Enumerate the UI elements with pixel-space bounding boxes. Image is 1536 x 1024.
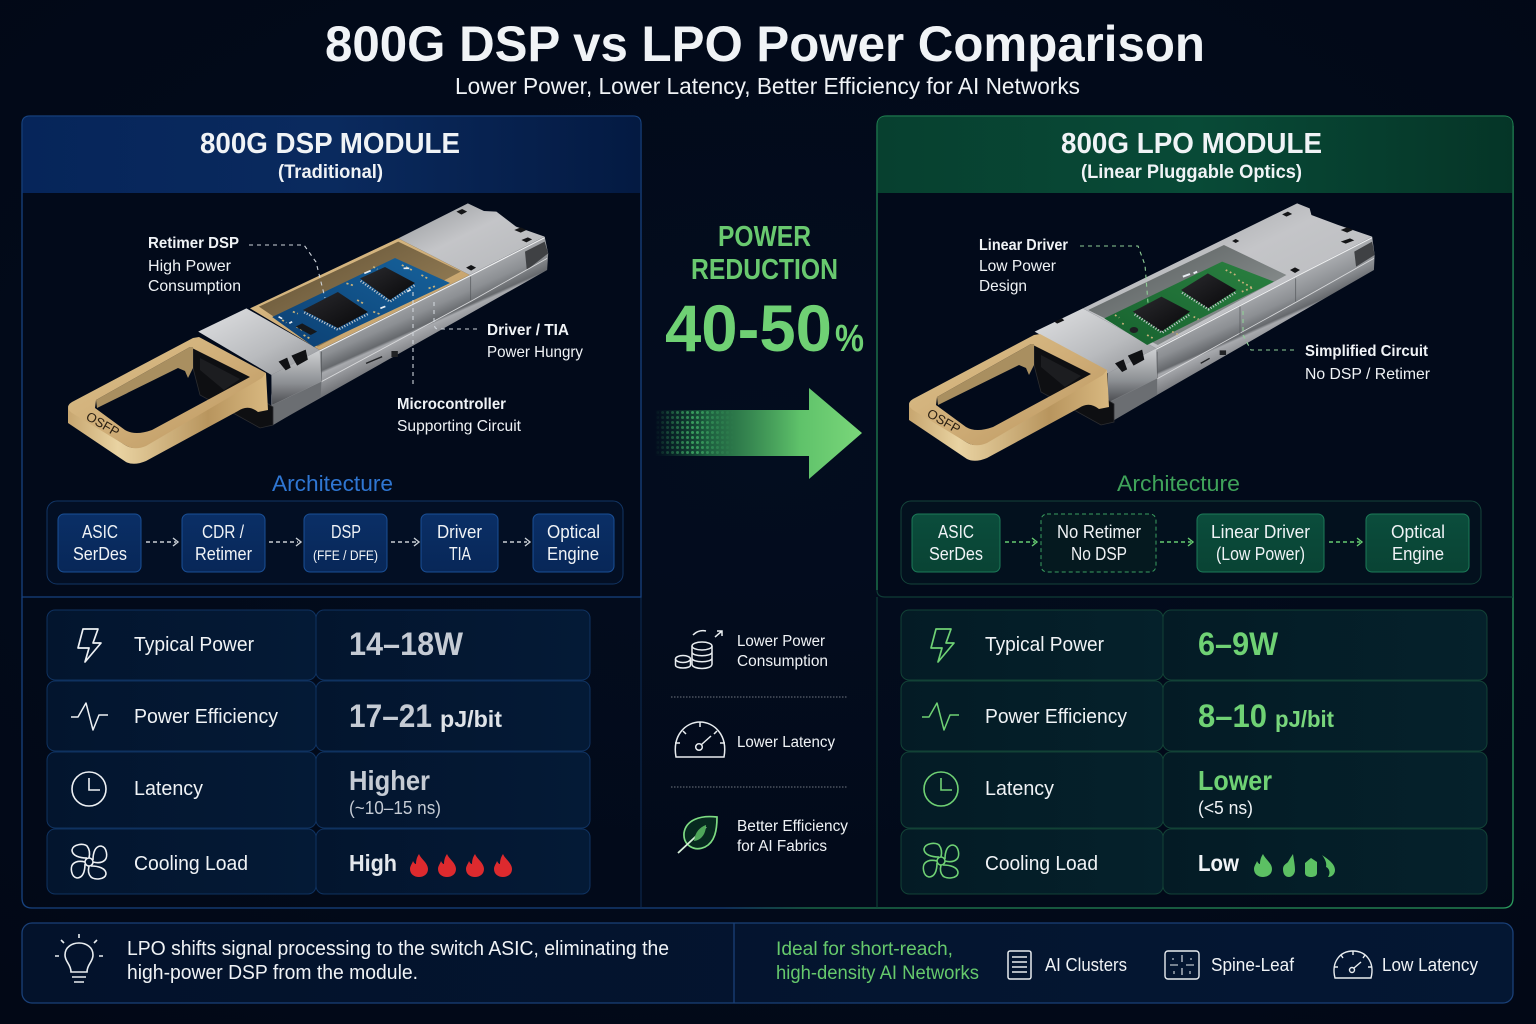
power reduction heading: REDUCTION xyxy=(691,254,838,286)
arrow: DSP to LPO xyxy=(655,388,862,479)
LPO panel box xyxy=(877,116,1513,597)
row: DSP typical power xyxy=(47,610,590,680)
row: LPO power efficiency: pJ/bit xyxy=(1275,706,1334,732)
callout: Microcontroller: Microcontroller xyxy=(397,396,506,413)
block: Optical Engine: Optical xyxy=(547,522,600,542)
arrows: LPO chain xyxy=(1005,538,1362,546)
footer explanation xyxy=(127,938,669,984)
DSP header band xyxy=(22,116,640,193)
Architecture heading: DSP: Architecture xyxy=(272,471,393,496)
callout lines: LPO xyxy=(1080,246,1294,350)
row: DSP power efficiency: 17–21 xyxy=(349,698,432,734)
icon: AI clusters: AI Clusters xyxy=(1045,955,1127,975)
row: DSP power efficiency xyxy=(47,681,590,751)
LPO subheading: (Linear Pluggable Optics) xyxy=(1081,162,1302,183)
block: Linear Driver xyxy=(1197,514,1324,572)
icon: AI clusters xyxy=(1008,951,1127,979)
callout: Retimer DSP: High Power xyxy=(148,258,232,275)
row: LPO latency: (<5 ns) xyxy=(1198,798,1253,818)
row: LPO power efficiency: 8–10 xyxy=(1198,698,1267,734)
block: ASIC SerDes: ASIC xyxy=(82,522,118,542)
row: LPO latency: Lower xyxy=(1198,765,1272,796)
block: Driver TIA xyxy=(421,514,498,572)
block: CDR / Retimer: Retimer xyxy=(195,544,252,564)
block: Linear Driver: (Low Power) xyxy=(1216,544,1305,564)
architecture diagram: DSP xyxy=(47,501,623,584)
row: DSP latency: (~10–15 ns) xyxy=(349,798,441,818)
DSP subheading: (Traditional) xyxy=(278,162,383,183)
callout: Microcontroller: Supporting Circuit xyxy=(397,418,522,435)
frame around comparison area xyxy=(22,126,1513,908)
icon: lightbulb xyxy=(55,934,103,982)
footer use case xyxy=(776,939,979,984)
block: Linear Driver: Linear Driver xyxy=(1211,522,1310,542)
divider xyxy=(671,697,848,787)
block: No Retimer No DSP: No Retimer xyxy=(1057,522,1141,542)
comparison table: DSP xyxy=(47,610,590,894)
footer use case: Ideal for short-reach, xyxy=(776,939,953,960)
block: ASIC SerDes: ASIC xyxy=(938,522,974,542)
architecture diagram: LPO xyxy=(901,501,1481,584)
row: LPO latency xyxy=(901,752,1487,828)
callout: Linear Driver: Design xyxy=(979,278,1027,295)
benefit: better efficiency: for AI Fabrics xyxy=(737,838,827,855)
callout: Simplified Circuit: Simplified Circuit xyxy=(1305,343,1429,360)
benefit: lower latency xyxy=(675,722,835,757)
row: LPO latency: Latency xyxy=(985,778,1054,800)
block: Driver TIA: TIA xyxy=(449,544,471,564)
callout: Linear Driver: Linear Driver xyxy=(979,237,1068,254)
illustration: LPO OSFP module: OSFP xyxy=(924,406,963,437)
power reduction heading xyxy=(691,221,838,286)
title: 800G DSP vs LPO Power Comparison xyxy=(325,16,1205,72)
row: DSP cooling load xyxy=(47,829,590,894)
icon: low latency gauge xyxy=(1334,951,1478,978)
block: ASIC SerDes xyxy=(912,514,1000,572)
block: No Retimer No DSP: No DSP xyxy=(1071,544,1127,564)
block: ASIC SerDes: SerDes xyxy=(929,544,983,564)
row: DSP cooling load: High xyxy=(349,850,397,876)
icon: green flames xyxy=(1254,854,1335,877)
callout: Retimer DSP: Retimer DSP xyxy=(148,235,239,252)
row: LPO cooling load: Cooling Load xyxy=(985,853,1098,875)
footer explanation: LPO shifts signal processing to the switch ASIC, eliminating the xyxy=(127,938,669,960)
block: DSP: DSP xyxy=(331,522,361,542)
footer use case: high-density AI Networks xyxy=(776,963,979,984)
icon: spine-leaf xyxy=(1165,951,1295,979)
row: DSP cooling load: Cooling Load xyxy=(134,853,248,875)
block: DSP: (FFE / DFE) xyxy=(313,547,378,563)
block: CDR / Retimer: CDR / xyxy=(202,522,244,542)
row: DSP power efficiency: Power Efficiency xyxy=(134,706,278,728)
benefit: better efficiency xyxy=(678,817,848,855)
block: Optical Engine: Optical xyxy=(1391,522,1445,542)
LPO heading: 800G LPO MODULE xyxy=(1061,128,1322,160)
icon: red flames xyxy=(410,854,512,877)
comparison table: LPO xyxy=(901,610,1487,894)
row: DSP power efficiency: pJ/bit xyxy=(440,706,502,732)
callout: Linear Driver xyxy=(979,237,1068,295)
illustration: LPO OSFP module xyxy=(909,203,1375,461)
panel: DSP module xyxy=(22,116,641,597)
callout: Retimer DSP xyxy=(148,235,241,295)
reduction figure: % xyxy=(835,318,864,360)
callout: Retimer DSP: Consumption xyxy=(148,278,241,295)
arrows: DSP chain xyxy=(146,538,530,546)
callout: Simplified Circuit: No DSP / Retimer xyxy=(1305,366,1431,383)
reduction figure: 40-50 xyxy=(665,291,832,365)
Architecture heading: LPO: Architecture xyxy=(1117,471,1240,496)
block: ASIC SerDes: SerDes xyxy=(73,544,127,564)
block: No Retimer No DSP xyxy=(1041,514,1156,572)
row: DSP typical power: 14–18W xyxy=(349,626,464,662)
center column: power reduction xyxy=(655,221,864,479)
benefit: lower power: Consumption xyxy=(737,653,828,670)
callout: Driver / TIA xyxy=(487,322,583,361)
DSP panel box xyxy=(22,116,641,597)
illustration: DSP OSFP module: OSFP xyxy=(84,409,122,440)
benefit: lower power: Lower Power xyxy=(737,633,825,650)
callout: Driver / TIA: Driver / TIA xyxy=(487,322,569,339)
block: ASIC SerDes xyxy=(58,514,141,572)
callout: Driver / TIA: Power Hungry xyxy=(487,344,583,361)
center benefits list xyxy=(671,631,848,855)
callout: Microcontroller xyxy=(397,396,522,435)
block: Optical Engine xyxy=(533,514,614,572)
benefit: better efficiency: Better Efficiency xyxy=(737,818,848,835)
DSP heading: 800G DSP MODULE xyxy=(200,128,460,160)
block: Driver TIA: Driver xyxy=(437,522,482,542)
LPO header band xyxy=(878,116,1512,193)
block: CDR / Retimer xyxy=(182,514,265,572)
power reduction heading: POWER xyxy=(718,221,811,253)
row: LPO cooling load xyxy=(901,829,1487,894)
row: LPO typical power: Typical Power xyxy=(985,634,1104,656)
row: LPO power efficiency xyxy=(901,681,1487,751)
footer explanation: high-power DSP from the module. xyxy=(127,962,418,984)
block: Optical Engine: Engine xyxy=(547,544,599,564)
row: DSP latency xyxy=(47,752,590,828)
subtitle: Lower Power, Lower Latency, Better Efficiency for AI Networks xyxy=(455,73,1080,99)
row: LPO typical power: 6–9W xyxy=(1198,626,1279,662)
callout: Simplified Circuit xyxy=(1305,343,1431,383)
row: DSP latency: Higher xyxy=(349,765,430,796)
benefit: lower latency: Lower Latency xyxy=(737,734,835,751)
callout: Linear Driver: Low Power xyxy=(979,258,1057,275)
row: LPO typical power xyxy=(901,610,1487,680)
block: Optical Engine xyxy=(1366,514,1469,572)
callout lines: DSP xyxy=(249,245,477,386)
panel: LPO module xyxy=(877,116,1513,597)
illustration: DSP OSFP module xyxy=(68,203,548,464)
row: LPO cooling load: Low xyxy=(1198,850,1239,876)
block: DSP xyxy=(304,514,387,572)
block: Optical Engine: Engine xyxy=(1392,544,1444,564)
row: DSP typical power: Typical Power xyxy=(134,634,254,656)
footer bar xyxy=(22,923,1513,1003)
icon: low latency gauge: Low Latency xyxy=(1382,955,1478,975)
benefit: lower power xyxy=(676,631,828,670)
icon: spine-leaf: Spine-Leaf xyxy=(1211,955,1295,975)
row: DSP latency: Latency xyxy=(134,778,203,800)
row: LPO power efficiency: Power Efficiency xyxy=(985,706,1127,728)
